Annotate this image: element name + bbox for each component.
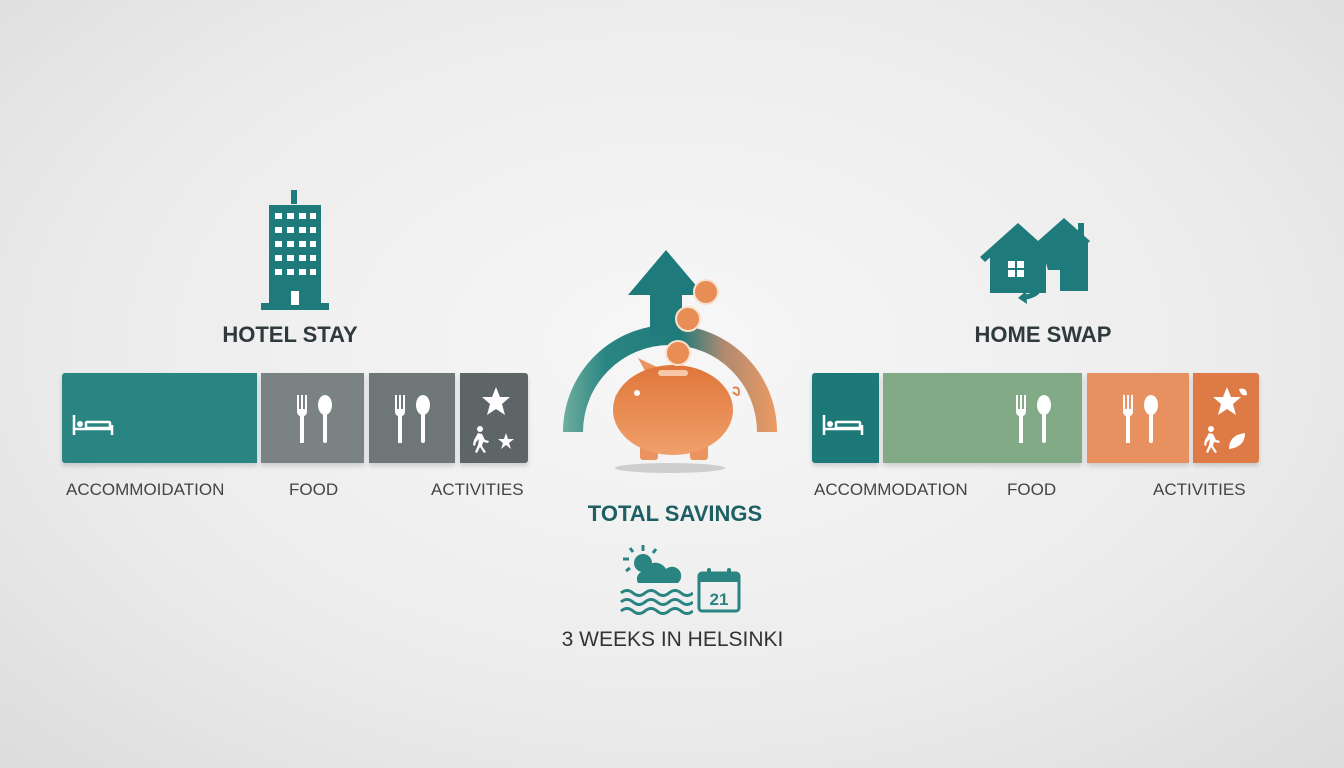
icon: home swap houses bbox=[980, 218, 1090, 304]
labels: home swap: ACCOMMODATION bbox=[814, 480, 968, 499]
segment: food 2 bbox=[369, 373, 455, 463]
segment: food bbox=[261, 373, 364, 463]
icon: calendar 21: 21 bbox=[710, 590, 728, 609]
text: ACTIVITIES bbox=[431, 480, 524, 499]
segment: food 2 bbox=[1087, 373, 1189, 463]
text: ACTIVITIES bbox=[1153, 480, 1246, 499]
segment: food bbox=[883, 373, 1082, 463]
text: FOOD bbox=[289, 480, 338, 499]
segment: accommodation bbox=[812, 373, 879, 463]
caption: 3 weeks in helsinki: 3 WEEKS IN HELSINKI bbox=[562, 628, 783, 651]
icon: hotel building bbox=[261, 190, 329, 310]
heading: hotel stay: HOTEL STAY bbox=[222, 322, 358, 347]
icon: weather and waves bbox=[620, 545, 693, 615]
heading: home swap: HOME SWAP bbox=[975, 322, 1111, 347]
segment: activities bbox=[1193, 373, 1259, 463]
icon: calendar 21 bbox=[698, 568, 740, 612]
heading: total savings: TOTAL SAVINGS bbox=[588, 501, 762, 526]
bar: hotel costs bbox=[60, 373, 530, 468]
segment: accommodation bbox=[62, 373, 257, 463]
graphic: savings arch with arrow and piggy bank bbox=[563, 250, 777, 473]
labels: hotel: ACCOMMOIDATION bbox=[66, 480, 224, 499]
text: FOOD bbox=[1007, 480, 1056, 499]
segment: activities bbox=[460, 373, 528, 463]
bar: home swap costs bbox=[810, 373, 1260, 468]
